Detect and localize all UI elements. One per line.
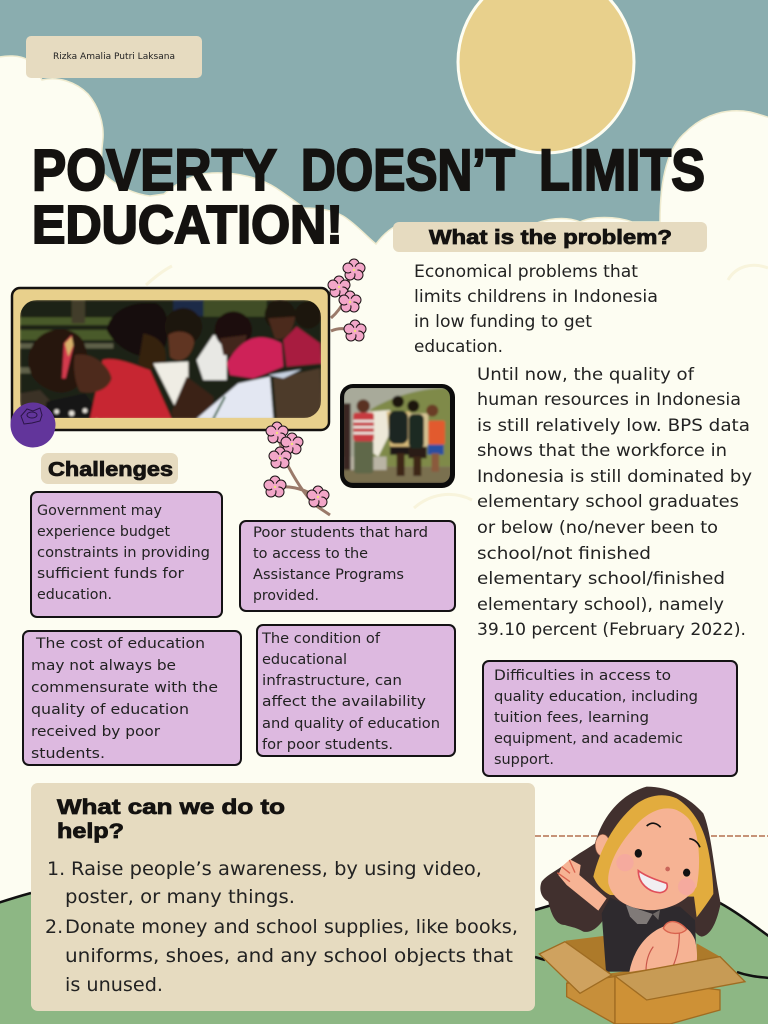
text block: BPS data: Indonesia is still dominated by bbox=[477, 467, 752, 487]
photo: children studying bbox=[12, 288, 329, 430]
card: cost of education: students. bbox=[31, 746, 105, 762]
card: access difficulties: equipment, and academic bbox=[494, 731, 683, 747]
heading: challenges bbox=[41, 453, 178, 484]
list: ways to help: Donate money and school supplies, like books, bbox=[65, 916, 518, 938]
icon: blueberry bbox=[10, 402, 56, 448]
heading: help bbox=[57, 796, 285, 843]
text block: BPS data: elementary school), namely bbox=[477, 595, 724, 615]
card: assistance programs: Assistance Programs bbox=[253, 567, 404, 583]
card: government budget: education. bbox=[37, 587, 112, 603]
title: EDUCATION! bbox=[32, 195, 343, 255]
card: cost of education: The cost of education bbox=[35, 636, 205, 652]
dashed horizon line bbox=[535, 835, 768, 837]
card: cost of education: commensurate with the bbox=[31, 680, 218, 696]
heading: help: What can we do to bbox=[57, 796, 285, 819]
card: infrastructure: for poor students. bbox=[262, 737, 393, 753]
text block: BPS data bbox=[477, 365, 752, 640]
card: assistance programs: provided. bbox=[253, 588, 319, 604]
flower branch: lower bbox=[264, 422, 330, 515]
list: ways to help: is unused. bbox=[65, 974, 163, 996]
text block: problem intro: in low funding to get bbox=[414, 312, 592, 332]
card: assistance programs bbox=[240, 521, 455, 611]
card: government budget: experience budget bbox=[37, 524, 171, 540]
list: ways to help bbox=[45, 858, 518, 996]
card: infrastructure: educational bbox=[262, 652, 347, 668]
photo: children walking bbox=[340, 384, 455, 488]
title: DOESN’T bbox=[301, 138, 515, 203]
faint background swirls bbox=[146, 265, 768, 508]
card: government budget bbox=[31, 492, 222, 617]
text block: problem intro: limits childrens in Indonesia bbox=[414, 287, 658, 307]
panel: what can we do to help bbox=[31, 783, 535, 1011]
text block: problem intro: education. bbox=[414, 337, 503, 357]
card: access difficulties: Difficulties in access to bbox=[494, 668, 671, 684]
card: government budget: Government may bbox=[37, 503, 162, 519]
card: infrastructure: The condition of bbox=[261, 631, 381, 647]
card: infrastructure: infrastructure, can bbox=[262, 673, 402, 689]
ground hills bbox=[0, 893, 768, 1024]
title: POVERTY bbox=[32, 138, 277, 203]
card: access difficulties: support. bbox=[494, 752, 554, 768]
card: infrastructure: affect the availability bbox=[262, 694, 426, 710]
card: cost of education: received by poor bbox=[31, 724, 160, 740]
heading: help: help? bbox=[57, 820, 124, 843]
title: LIMITS bbox=[539, 138, 705, 203]
list: ways to help: uniforms, shoes, and any school objects that bbox=[65, 945, 513, 967]
list: ways to help: Raise people’s awareness, by using video, bbox=[71, 858, 482, 880]
illustration: girl in cardboard box bbox=[539, 787, 745, 1024]
card: infrastructure bbox=[257, 625, 455, 756]
text block: problem intro: Economical problems that bbox=[414, 262, 638, 282]
list: ways to help: poster, or many things. bbox=[65, 886, 295, 908]
author tag: Rizka Amalia Putri Laksana bbox=[53, 52, 175, 62]
text block: BPS data: shows that the workforce in bbox=[477, 441, 727, 461]
text block: BPS data: Until now, the quality of bbox=[477, 365, 695, 385]
text block: BPS data: or below (no/never been to bbox=[477, 518, 718, 538]
card: government budget: constraints in providing bbox=[37, 545, 210, 561]
card: government budget: sufficient funds for bbox=[37, 566, 184, 582]
sun bbox=[458, 0, 634, 153]
card: access difficulties bbox=[483, 661, 737, 776]
text block: BPS data: 39.10 percent (February 2022). bbox=[477, 620, 746, 640]
card: access difficulties: tuition fees, learning bbox=[494, 710, 649, 726]
title bbox=[32, 138, 705, 255]
text block: BPS data: is still relatively low. BPS data bbox=[477, 416, 750, 436]
card: assistance programs: Poor students that hard bbox=[253, 525, 428, 541]
card: cost of education: may not always be bbox=[31, 658, 176, 674]
heading: challenges: Challenges bbox=[48, 459, 173, 481]
card: cost of education: quality of education bbox=[31, 702, 189, 718]
list: ways to help: 1. bbox=[47, 858, 65, 880]
text block: problem intro bbox=[414, 262, 658, 357]
card: access difficulties: quality education, including bbox=[494, 689, 698, 705]
heading: what is the problem: What is the problem? bbox=[429, 227, 672, 249]
author tag bbox=[26, 36, 202, 78]
text block: BPS data: elementary school/finished bbox=[477, 569, 725, 589]
card: infrastructure: and quality of education bbox=[262, 716, 440, 732]
card: cost of education bbox=[23, 631, 241, 765]
card: assistance programs: to access to the bbox=[253, 546, 368, 562]
text block: BPS data: school/not finished bbox=[477, 544, 651, 564]
text block: BPS data: human resources in Indonesia bbox=[477, 390, 741, 410]
flower branch: upper bbox=[328, 259, 366, 341]
text block: BPS data: elementary school graduates bbox=[477, 492, 739, 512]
list: ways to help: 2. bbox=[45, 916, 63, 938]
heading: what is the problem bbox=[393, 222, 707, 252]
